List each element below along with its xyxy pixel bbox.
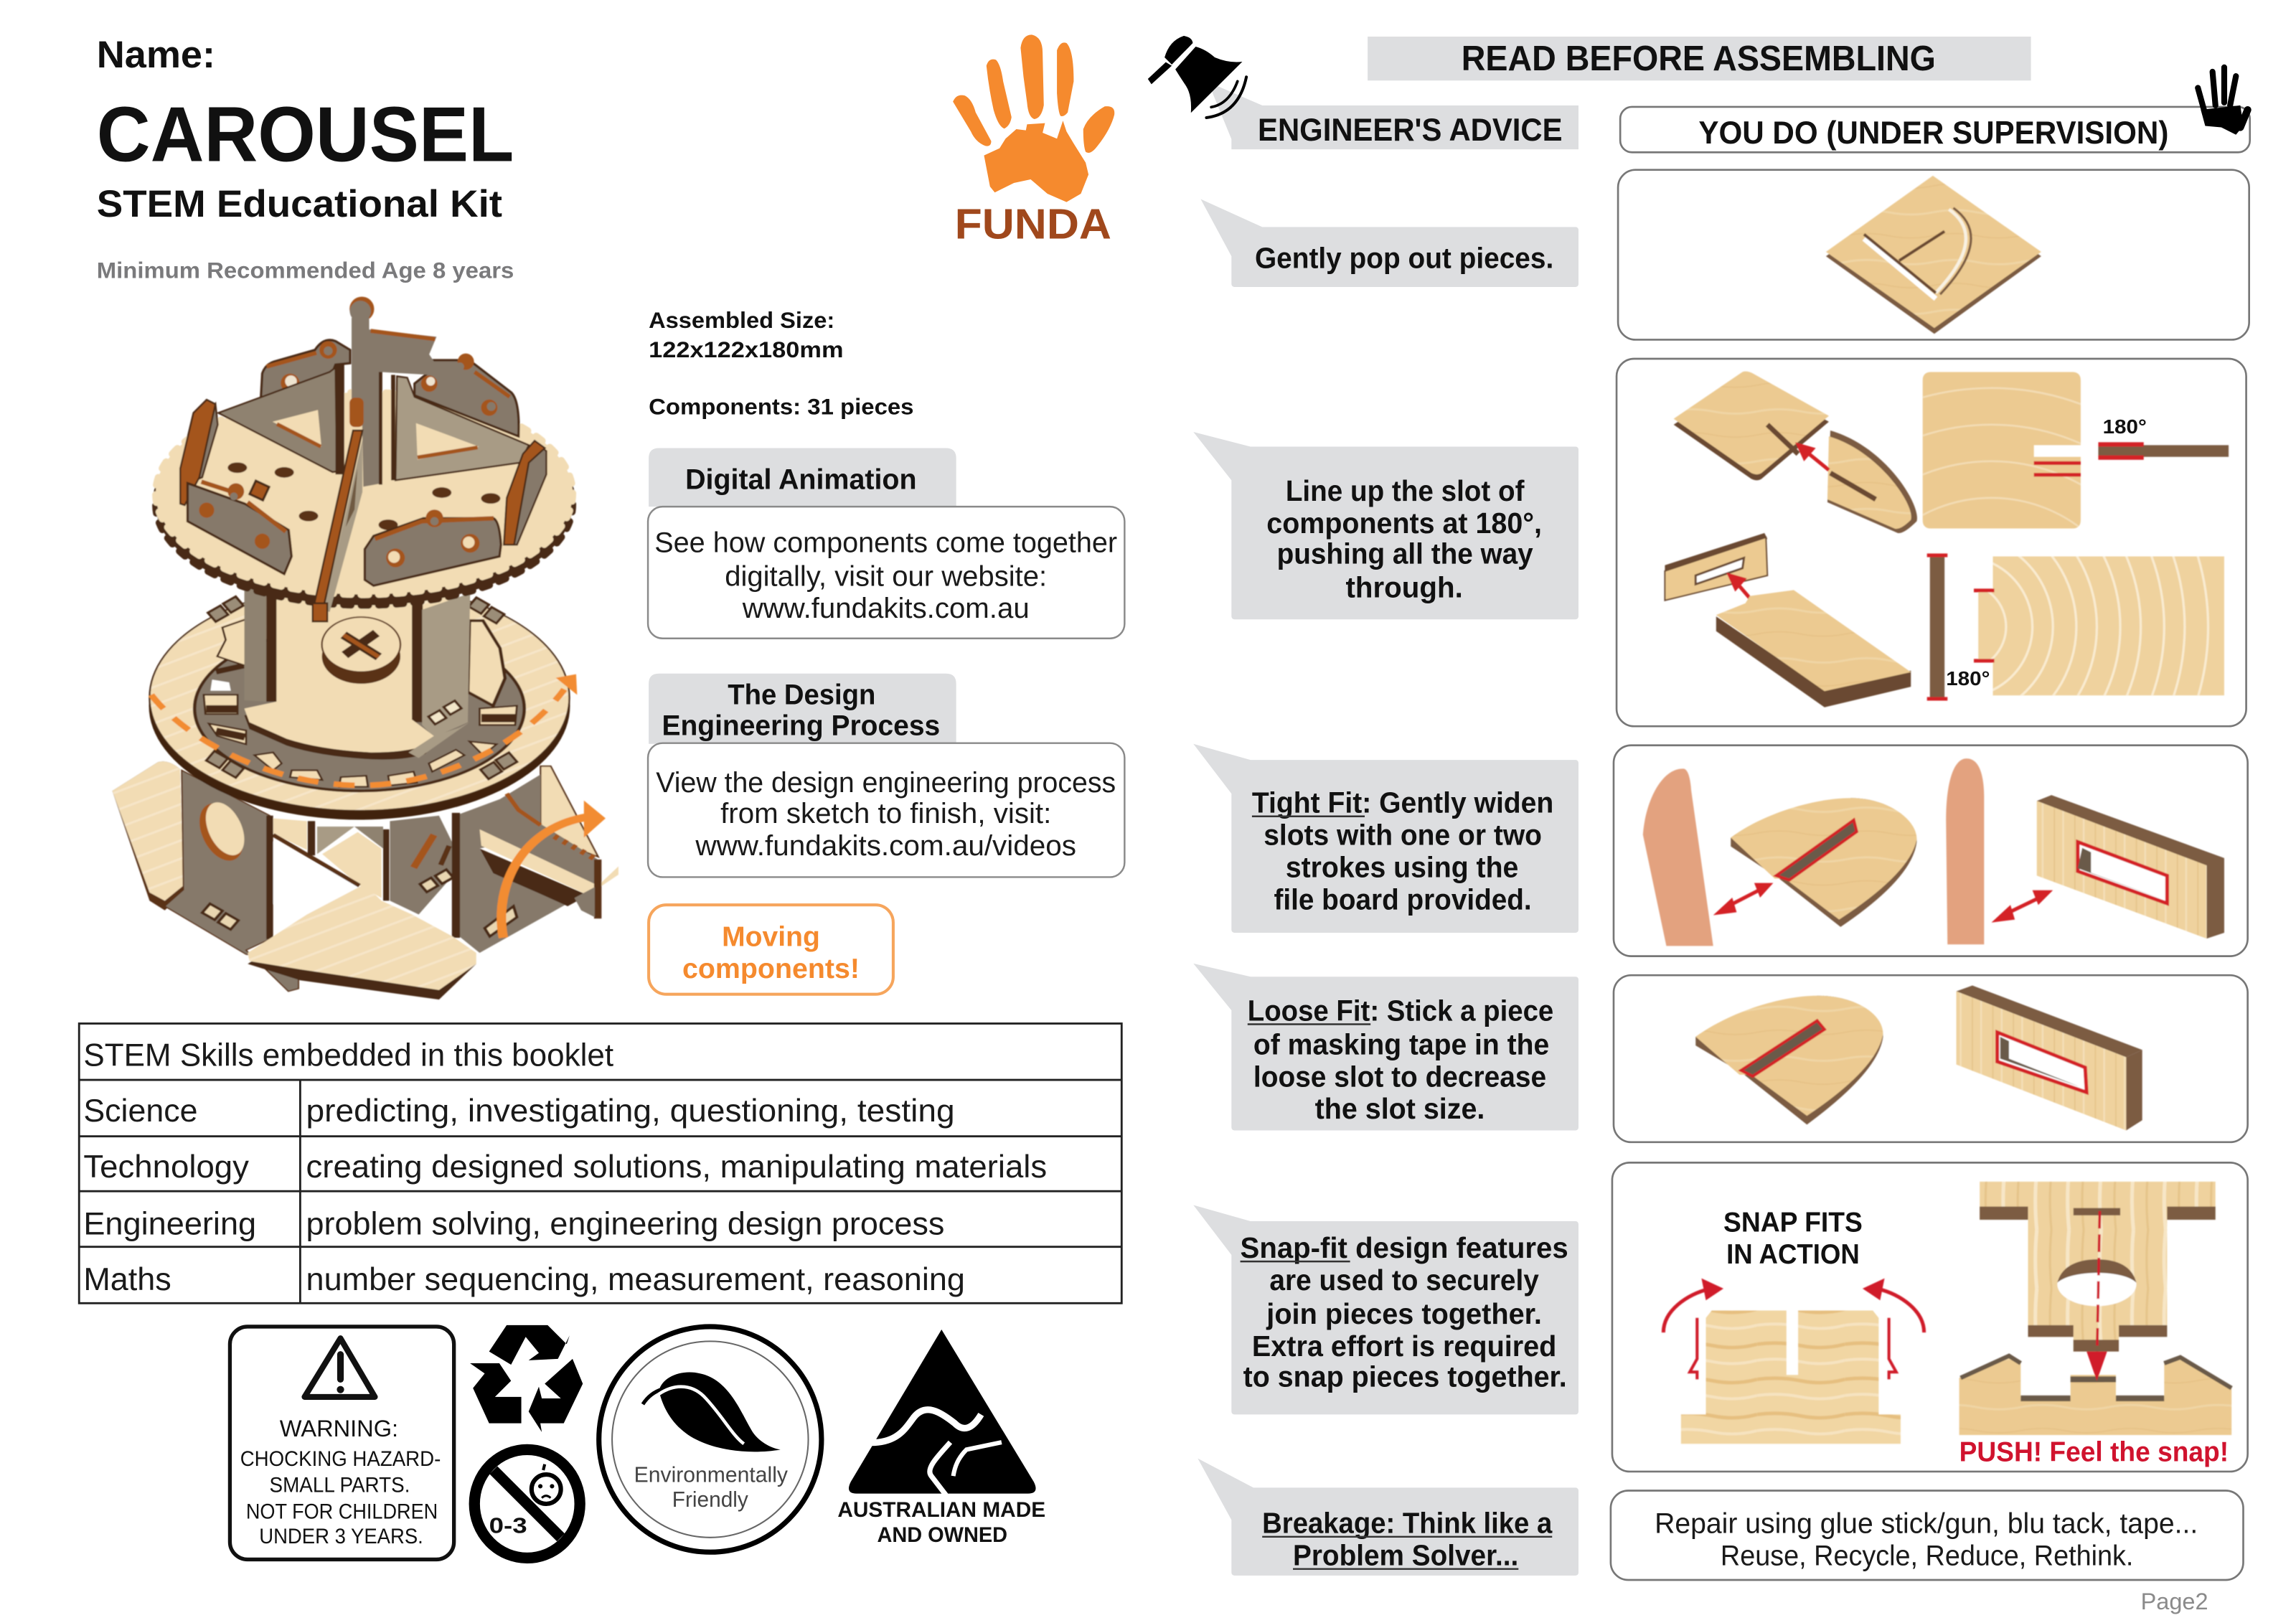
callout: loose fit: of masking tape in the	[1253, 1027, 1549, 1060]
page number: Page2	[2141, 1588, 2208, 1614]
callout: tight fit: slots with one or two	[1264, 819, 1542, 852]
arrow: push down	[2086, 1211, 2107, 1380]
callout: line up the slot: through.	[1346, 571, 1463, 604]
name label: Name:	[97, 34, 215, 76]
label: 180 bottom: 180°	[1946, 667, 1990, 690]
design engineering process box	[648, 743, 1124, 877]
illustration: assembled carousel	[113, 296, 618, 999]
moving crank	[479, 794, 618, 918]
digital animation box: digitally, visit our website:	[725, 560, 1047, 592]
front slotted panels	[187, 481, 501, 585]
table: STEM skills	[79, 1024, 1121, 1303]
assembled size text	[649, 307, 844, 362]
icon: bell	[1148, 36, 1246, 118]
header: engineer's advice	[1208, 82, 1578, 149]
digital animation tab: Digital Animation	[685, 464, 917, 496]
header: you do	[1620, 107, 2250, 152]
triangular fins	[218, 364, 529, 480]
badge: environmentally friendly: Friendly	[672, 1487, 749, 1512]
arrow: push up	[1726, 573, 1754, 603]
back right wood wing	[540, 766, 598, 857]
logo: funda: FUNDA	[955, 200, 1111, 248]
upper T piece	[1980, 1182, 2216, 1352]
badge: environmentally friendly: Environmentally	[634, 1462, 789, 1487]
panel: pop out pieces	[1618, 170, 2249, 339]
middle ring	[149, 585, 570, 819]
callout: breakage: Problem Solver...	[1293, 1539, 1518, 1572]
panel: repair text: Repair using glue stick/gun, blu tack, tape...	[1655, 1508, 2198, 1540]
centre and right grey panels	[390, 774, 568, 953]
callout: breakage	[1198, 1459, 1578, 1576]
central column	[245, 585, 470, 760]
callout: snap-fit: Extra effort is required	[1252, 1330, 1556, 1363]
arrows on the carousel	[151, 674, 606, 938]
row: technology: Technology	[83, 1148, 250, 1185]
design engineering process box: www.fundakits.com.au/videos	[695, 830, 1076, 862]
banner: read before assembling	[1368, 37, 2031, 80]
icon: kangaroo triangle	[849, 1330, 1036, 1495]
row: science: Science	[83, 1092, 198, 1129]
label: 180 top: 180°	[2103, 415, 2147, 438]
warning label: NOT FOR CHILDREN	[246, 1500, 438, 1523]
callout: line up the slot: pushing all the way	[1277, 537, 1533, 570]
row: technology: creating designed solutions, manipulating materials	[306, 1148, 1047, 1185]
panel: repair text: Reuse, Recycle, Reduce, Rethink.	[1721, 1540, 2133, 1572]
edge-on view	[2098, 442, 2229, 460]
callout: tight fit	[1193, 744, 1578, 933]
back structure through the opening	[266, 816, 389, 939]
callout: snap-fit: to snap pieces together.	[1243, 1360, 1567, 1393]
label: snap fits in action: SNAP FITS	[1723, 1207, 1863, 1238]
callout: loose fit: the slot size.	[1315, 1092, 1485, 1125]
double arrow left	[1713, 883, 1773, 915]
badge: australian made	[837, 1330, 1045, 1547]
row: engineering: problem solving, engineering design process	[306, 1205, 944, 1241]
inner slats	[204, 695, 517, 787]
warning label: CHOCKING HAZARD-	[240, 1447, 441, 1471]
tabbed piece	[1716, 590, 1911, 707]
panel: line up the slot	[1617, 359, 2248, 900]
callout: snap-fit: join pieces together.	[1266, 1297, 1542, 1330]
title: CAROUSEL	[97, 90, 514, 177]
panel: snap fits	[1612, 1162, 2248, 1472]
label: snap fits in action	[1723, 1207, 1863, 1270]
callout: loose fit: Loose Fit: Stick a piece	[1248, 994, 1553, 1027]
icon: orange hand	[953, 34, 1114, 202]
table header: STEM Skills embedded in this booklet	[83, 1037, 614, 1073]
file board right	[1946, 758, 1984, 944]
design engineering process tab	[649, 674, 956, 744]
callout: gently pop out	[1200, 199, 1578, 287]
back panels	[260, 340, 519, 436]
design engineering process box: View the design engineering process	[656, 767, 1116, 799]
ring slot tabs	[206, 597, 517, 779]
row: engineering: Engineering	[83, 1205, 256, 1241]
block with slot	[1665, 533, 1767, 601]
front fin	[313, 397, 364, 621]
row: maths: Maths	[83, 1261, 171, 1297]
panel: tight fit	[1614, 745, 2248, 956]
arrow: left flex	[1663, 1279, 1723, 1379]
callout: snap-fit: are used to securely	[1269, 1264, 1539, 1297]
digital animation box: See how components come together	[654, 527, 1117, 558]
double arrow right	[1991, 890, 2053, 923]
digital animation tab	[649, 448, 956, 507]
callout: gently pop out: Gently pop out pieces.	[1255, 241, 1553, 274]
design engineering process tab: The Design	[728, 679, 875, 711]
digital animation box	[648, 507, 1124, 639]
thin edge bar	[1927, 553, 1947, 701]
panel: loose fit	[1614, 975, 2248, 1142]
badge: australian made: AND OWNED	[877, 1523, 1007, 1547]
half oval piece	[1827, 431, 1917, 533]
callout: line up the slot	[1193, 432, 1578, 619]
banner: read before assembling: READ BEFORE ASSEMBLING	[1462, 39, 1936, 78]
arrow: crank movement	[502, 801, 606, 938]
screw head with cross slot	[322, 617, 400, 684]
label: push feel the snap: PUSH! Feel the snap!	[1959, 1437, 2229, 1468]
upper hub wood	[217, 619, 246, 666]
callout: line up the slot: components at 180°,	[1266, 507, 1542, 540]
components count: Components: 31 pieces	[649, 394, 913, 420]
callout: line up the slot: Line up the slot of	[1286, 474, 1525, 507]
arrow: push together	[1795, 442, 1829, 470]
front view of tile	[1921, 372, 2082, 530]
callout: tight fit: file board provided.	[1274, 883, 1532, 916]
row: maths: number sequencing, measurement, reasoning	[306, 1261, 965, 1297]
callout: tight fit: strokes using the	[1286, 850, 1518, 883]
left grey panel	[165, 771, 298, 992]
header: you do: YOU DO (UNDER SUPERVISION)	[1698, 114, 2168, 151]
bottom plate	[248, 884, 476, 999]
subtitle: STEM Educational Kit	[97, 183, 502, 225]
icon: leaf	[643, 1372, 781, 1452]
label: snap fits in action: IN ACTION	[1726, 1239, 1860, 1270]
arrow: right flex	[1863, 1279, 1924, 1379]
warning label: UNDER 3 YEARS.	[259, 1525, 423, 1548]
half oval piece	[1695, 996, 1883, 1124]
header: engineer's advice: ENGINEER'S ADVICE	[1258, 111, 1563, 148]
logo: funda	[953, 34, 1114, 248]
flag pole and flag	[349, 296, 438, 486]
moving components callout: Moving	[722, 921, 820, 952]
icon: black hand	[2198, 67, 2248, 135]
panel: repair text	[1611, 1491, 2244, 1580]
row: science: predicting, investigating, questioning, testing	[306, 1092, 955, 1129]
badge: environmentally friendly	[599, 1327, 822, 1552]
lower slotted piece	[1959, 1355, 2231, 1435]
callout: loose fit	[1193, 964, 1578, 1130]
warning label	[230, 1327, 454, 1559]
left wood wing	[113, 761, 184, 911]
moving components callout	[649, 905, 893, 994]
age recommendation: Minimum Recommended Age 8 years	[97, 258, 514, 283]
warning label: SMALL PARTS.	[270, 1474, 410, 1497]
assembled size text: 122x122x180mm	[649, 337, 844, 362]
callout: tight fit: Tight Fit: Gently widen	[1252, 786, 1553, 819]
badge: australian made: AUSTRALIAN MADE	[837, 1498, 1045, 1522]
half oval piece	[1731, 798, 1916, 927]
digital animation box: www.fundakits.com.au	[742, 593, 1030, 624]
icon: warning triangle	[305, 1338, 375, 1397]
top scalloped disk	[156, 296, 573, 621]
assembled size text: Assembled Size:	[649, 307, 834, 333]
icon: not for ages 0-3	[474, 1449, 580, 1558]
carousel base	[113, 761, 618, 999]
icon: recycle	[470, 1325, 583, 1432]
illustration: square tile with cut-out	[1826, 176, 2041, 334]
design engineering process tab: Engineering Process	[662, 710, 940, 741]
callout: snap-fit	[1193, 1205, 1578, 1414]
callout: snap-fit: Snap-fit design features	[1241, 1231, 1568, 1264]
design engineering process box: from sketch to finish, visit:	[720, 798, 1051, 829]
callout: breakage: Breakage: Think like a	[1262, 1507, 1553, 1540]
arrow: rotation path	[151, 674, 577, 786]
moving components callout: components!	[682, 954, 860, 984]
snap tab piece	[1681, 1310, 1901, 1444]
icon: not for ages 0-3: 0-3	[489, 1514, 527, 1538]
tile with slot	[1674, 372, 1829, 480]
slotted block	[2037, 795, 2224, 938]
warning label: WARNING:	[280, 1415, 398, 1441]
side narrow panels	[180, 400, 546, 545]
large wood front with tab	[1973, 555, 2225, 696]
callout: loose fit: loose slot to decrease	[1253, 1060, 1546, 1093]
slotted block	[1957, 985, 2142, 1130]
file board left	[1643, 768, 1713, 946]
